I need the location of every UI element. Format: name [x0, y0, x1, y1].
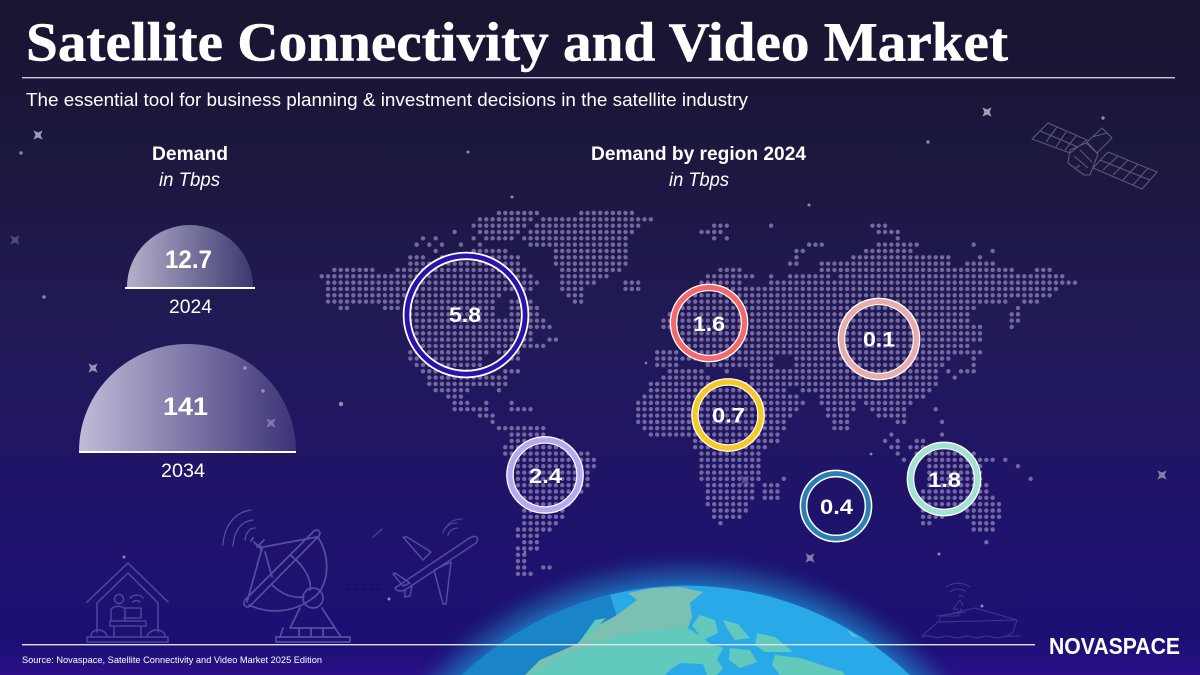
dome 2024: 12.7: [165, 246, 212, 274]
subtitle: The essential tool for business planning & investment decisions in the satellite industry: [26, 89, 749, 110]
dome 2034: [79, 344, 296, 482]
dome 2024: 2024: [169, 297, 212, 318]
region bubble: Asia Pacific 1.8: 1.8: [928, 468, 961, 492]
panel: demand by region heading: in Tbps: [669, 170, 729, 191]
dashes near airplane: [347, 588, 380, 590]
icon: satellite: [1032, 123, 1157, 189]
icon: airplane: [373, 519, 478, 604]
dome 2034: 2034: [161, 461, 205, 482]
region bubble: Middle East and Africa 0.7: [692, 379, 764, 451]
region bubble: Latin America 2.4: 2.4: [529, 464, 562, 488]
region bubble: North America 5.8: 5.8: [449, 303, 481, 327]
globe with glow: [422, 557, 950, 675]
dome 2034: 141: [163, 393, 208, 421]
footer rule: [22, 644, 1035, 645]
panel: demand by region heading: Demand by region 2024: [591, 144, 806, 165]
title: Satellite Connectivity and Video Market: [26, 12, 1009, 72]
source note: Source: Novaspace, Satellite Connectivity and Video Market 2025 Edition: [22, 655, 322, 666]
dotted world map: [322, 213, 1075, 574]
region bubble: Asia Pacific 1.8: [908, 442, 980, 516]
panel: demand by region heading: [591, 144, 806, 191]
icon: home user: [87, 563, 168, 642]
region bubble: Russia and Central Asia 0.1: 0.1: [863, 328, 895, 352]
region bubble: South Asia 0.4: 0.4: [820, 495, 853, 519]
starfield: [6, 103, 1171, 607]
title rule: [22, 77, 1175, 78]
region bubble: South Asia 0.4: [800, 470, 872, 542]
demand heading: Demand: [152, 144, 228, 165]
icon: yacht: [922, 583, 1020, 638]
region bubble: Latin America 2.4: [507, 437, 583, 513]
region bubble: Europe 1.6: 1.6: [693, 312, 725, 336]
icon: satellite dish: [223, 510, 350, 642]
region bubble: Middle East and Africa 0.7: 0.7: [712, 404, 745, 428]
region bubble: North America 5.8: [404, 253, 528, 377]
dome 2024: [125, 225, 255, 318]
region bubble: Russia and Central Asia 0.1: [838, 298, 920, 380]
region bubble: Europe 1.6: [670, 284, 748, 362]
panel: demand: [79, 144, 296, 482]
demand unit: in Tbps: [159, 170, 220, 191]
logo: Novaspace: NOVASPACE: [1049, 633, 1180, 659]
